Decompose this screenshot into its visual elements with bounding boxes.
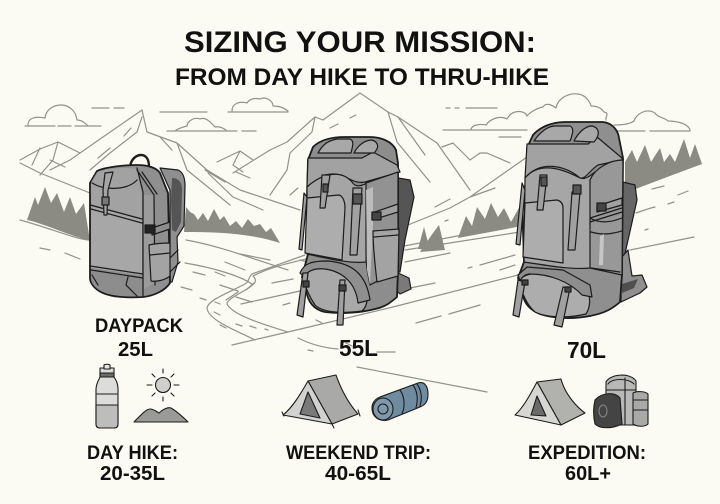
label: day hike range: 20-35L (100, 463, 165, 485)
pack seams (90, 168, 157, 296)
side panel (590, 160, 623, 275)
title: SIZING YOUR MISSION: (184, 26, 536, 59)
mountains (20, 93, 700, 323)
front pocket (523, 200, 563, 263)
icon: tent (282, 375, 360, 428)
pack body (302, 137, 398, 313)
shoulder strap (160, 168, 185, 282)
straps and buckles (513, 175, 622, 327)
pack straps and buckles (92, 172, 180, 296)
backpack: daypack 25L (90, 155, 185, 297)
bottom compartment (302, 267, 367, 312)
shoulder and hip straps (397, 178, 414, 272)
icon: water bottle (96, 364, 118, 428)
mid panel (307, 174, 367, 262)
label: day hike: DAY HIKE: (87, 443, 178, 464)
side pocket (373, 229, 399, 282)
backpack: weekend 55L (297, 137, 414, 325)
side panel (366, 172, 398, 285)
bottom compartment (519, 273, 590, 317)
label: 25L: 25L (118, 339, 153, 361)
icon: gear pile (594, 375, 648, 428)
front panel (91, 205, 142, 275)
straps and buckles (297, 175, 398, 325)
label: 55L: 55L (339, 335, 378, 361)
landscape background (20, 93, 702, 392)
lid (525, 137, 622, 178)
label: expedition range: 60L+ (565, 463, 611, 485)
subtitle: FROM DAY HIKE TO THRU-HIKE (175, 64, 549, 91)
label: 70L: 70L (567, 337, 606, 363)
winding trail (200, 255, 518, 392)
pack body (518, 122, 623, 318)
label: daypack: DAYPACK (95, 316, 183, 337)
icon: expedition tent (515, 379, 585, 425)
backpack: expedition 70L (513, 122, 647, 327)
icon: sun over hills (134, 369, 188, 422)
label: weekend trip: WEEKEND TRIP: (286, 443, 431, 464)
front pocket (305, 195, 345, 260)
lid (307, 152, 400, 187)
label: weekend range: 40-65L (325, 463, 391, 485)
tree lines (27, 139, 702, 252)
top handle (130, 155, 149, 167)
mid panel (524, 168, 595, 268)
clouds (25, 94, 690, 137)
pack body (90, 165, 170, 297)
label: expedition: EXPEDITION: (528, 443, 646, 464)
icon: sleeping bag roll (372, 383, 428, 420)
shoulder and hip straps (622, 182, 637, 258)
